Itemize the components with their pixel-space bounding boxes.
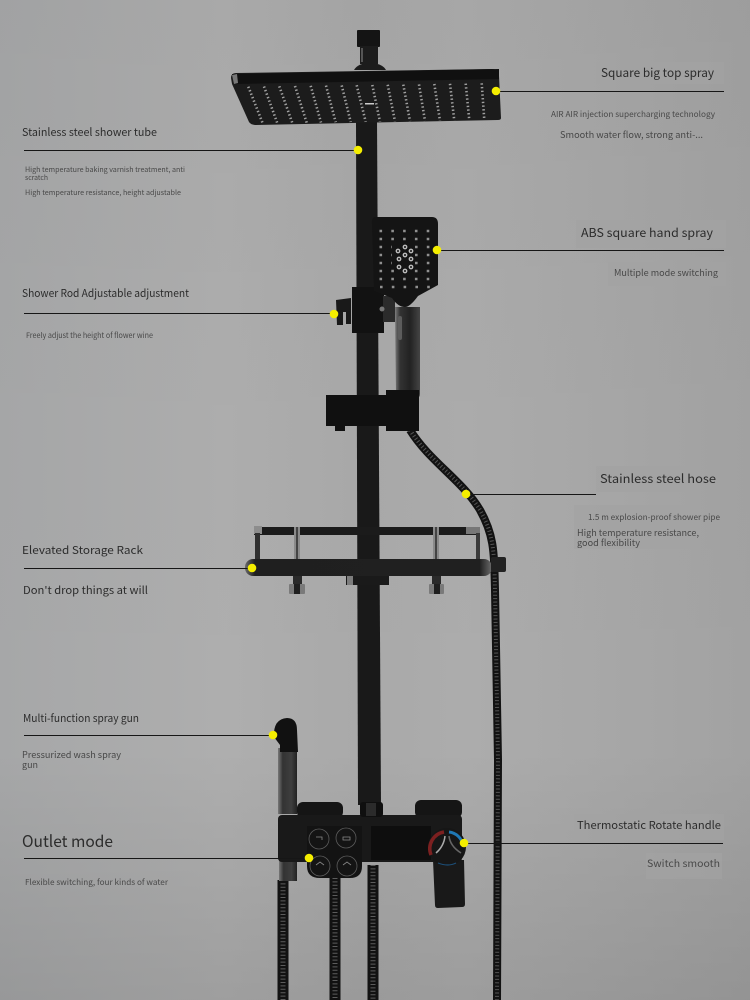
label: outlet mode [22,828,169,888]
hose: long hand spray hose [410,430,498,1000]
spray gun [274,718,298,881]
label: elevated storage rack: Elevated Storage Rack [22,542,143,558]
label: thermostatic rotate handle: Switch smooth [647,855,720,870]
storage rack [245,526,506,594]
hand spray [372,217,438,398]
hooks [289,576,444,594]
label: stainless steel shower tube: High temperature resistance, height adjustable [25,188,181,198]
posts [255,527,480,560]
mixer valve body [278,800,462,878]
label: shower rod adjustment: Shower Rod Adjustable adjustment [22,285,189,301]
label: thermostatic rotate handle [577,817,721,870]
nozzles [380,231,432,287]
text backing panels [574,62,726,879]
label: elevated storage rack [22,542,148,598]
label: ABS square hand spray [581,224,718,279]
label: stainless steel shower tube: scratch [25,173,48,183]
leader lines [24,92,724,858]
label: multi-function spray gun: Pressurized wash spray [22,748,121,761]
adjustment knob [336,298,351,325]
label: square big top spray: Square big top spray [601,64,715,81]
label: thermostatic rotate handle: Thermostatic Rotate handle [577,817,721,833]
label: square big top spray: AIR AIR injection supercharging technology [551,109,716,120]
top spray head [231,30,501,125]
lower hoses [283,865,373,1000]
neck [354,30,386,70]
shelf [245,559,492,576]
handle [395,307,420,398]
label: multi-function spray gun: gun [22,758,38,771]
label: multi-function spray gun: Multi-function spray gun [23,711,139,726]
label: outlet mode: Outlet mode [22,828,113,852]
label: stainless steel shower tube [22,124,185,198]
label: stainless steel shower tube: High temperature baking varnish treatment, anti [25,165,185,175]
button panel [307,826,362,878]
label: square big top spray: Smooth water flow, strong anti-... [560,128,703,141]
yellow marker dots [248,87,500,862]
head plate [231,69,501,125]
shower rod bracket [336,287,395,333]
label: shower rod adjustment [22,285,189,341]
label: ABS square hand spray: Multiple mode switching [614,266,718,279]
top rail [254,527,480,535]
label: outlet mode: Flexible switching, four kinds of water [25,877,169,888]
label: ABS square hand spray: ABS square hand spray [581,224,714,241]
label: square big top spray [551,64,716,141]
thermostatic handle [428,828,466,908]
label: stainless steel hose: 1.5 m explosion-proof shower pipe [588,512,721,523]
nozzle columns [248,83,484,123]
hand spray holder [326,390,419,431]
label: elevated storage rack: Don't drop things at will [23,583,148,598]
label: stainless steel hose: Stainless steel hose [600,470,716,487]
label: shower rod adjustment: Freely adjust the height of flower wine [26,330,153,341]
label: stainless steel hose: good flexibility [577,536,640,549]
head [372,217,438,307]
pole [356,120,381,805]
label: stainless steel hose [577,470,721,549]
label: stainless steel shower tube: Stainless steel shower tube [22,124,157,140]
nut [360,802,383,817]
label: stainless steel hose: High temperature resistance, [577,526,699,539]
label: multi-function spray gun [22,711,139,771]
